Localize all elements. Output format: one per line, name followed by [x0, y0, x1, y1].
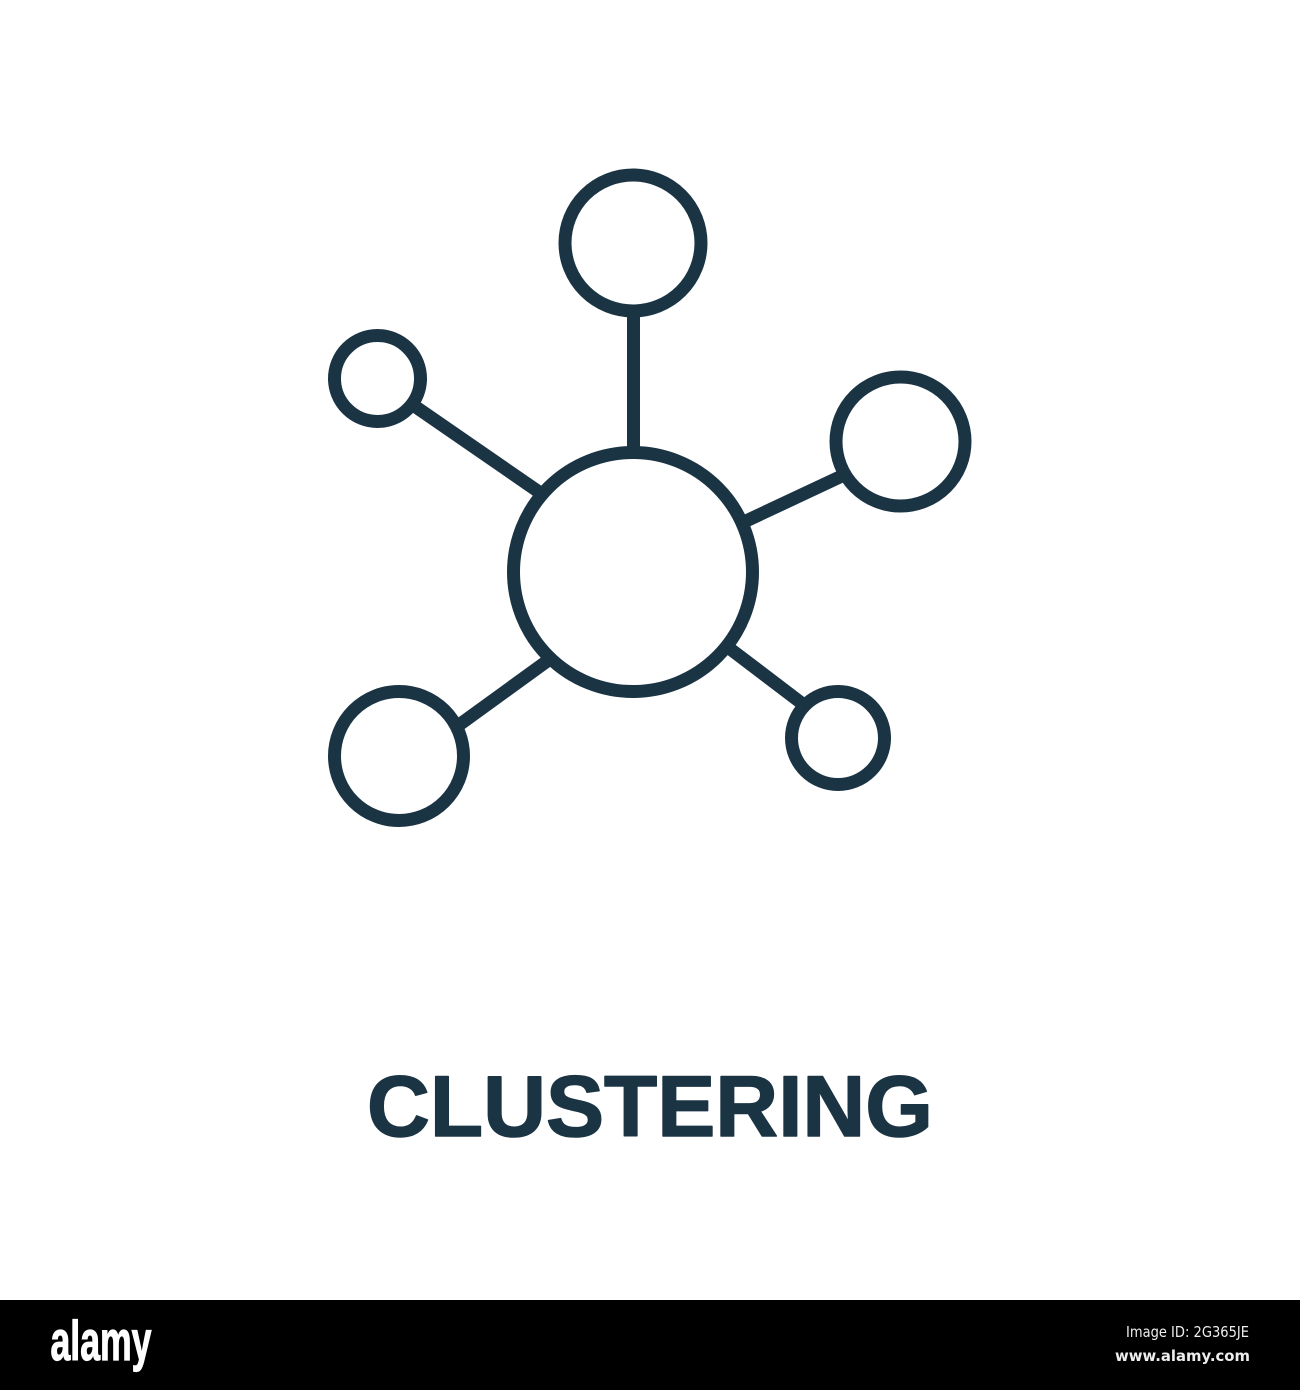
- right node: [836, 377, 965, 506]
- image ID: Image ID: 2G365JE: [1126, 1323, 1249, 1341]
- upper left node: [334, 336, 420, 422]
- lower right node: [792, 692, 884, 784]
- connector: right: [746, 475, 844, 521]
- footer logo: alamy: [50, 1309, 152, 1372]
- central node: [514, 452, 752, 692]
- title: CLUSTERING: [367, 1059, 933, 1155]
- lower left node: [334, 692, 464, 820]
- connector: top: [627, 312, 640, 452]
- website address: www.alamy.com: [1115, 1347, 1250, 1365]
- connector: lower left: [459, 659, 550, 725]
- top node: [565, 175, 701, 311]
- connector: upper left: [413, 405, 539, 492]
- connector: lower right: [729, 648, 804, 705]
- icon: clustering network: [334, 175, 965, 820]
- footer bar: [0, 1300, 1300, 1390]
